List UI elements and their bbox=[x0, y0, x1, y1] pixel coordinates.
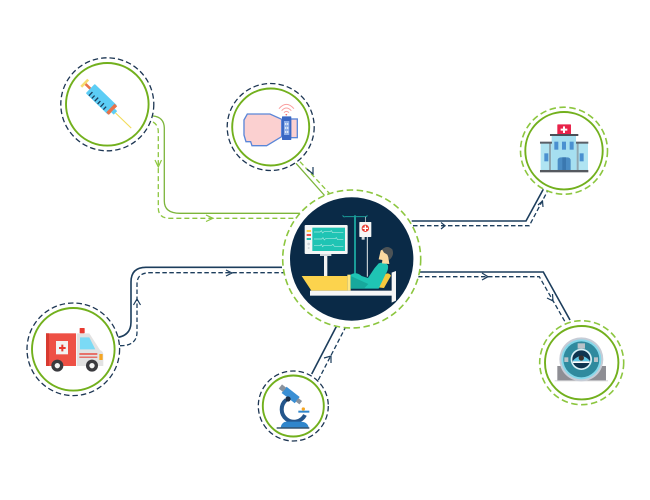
IV stand and drip bag bbox=[343, 215, 371, 277]
node: central patient illustration bbox=[283, 190, 421, 328]
connector: ambulance to patient bbox=[118, 267, 284, 346]
illustration: patient in hospital bed with monitor and IV bbox=[302, 215, 396, 303]
node: microscope bbox=[258, 371, 328, 441]
patient monitor bbox=[305, 225, 348, 277]
icon: ambulance bbox=[46, 328, 103, 372]
node: MRI scanner bbox=[540, 321, 624, 405]
connector: patient to MRI scanner bbox=[418, 272, 570, 322]
connector: microscope to patient bbox=[312, 323, 345, 380]
node: ambulance bbox=[27, 303, 120, 396]
icon: microscope bbox=[277, 384, 309, 429]
bed bbox=[302, 271, 396, 303]
icon: syringe bbox=[79, 78, 136, 133]
patient bbox=[351, 247, 393, 289]
connector: wristband to patient bbox=[296, 162, 330, 196]
icon: hospital building bbox=[540, 124, 588, 172]
icon: MRI scanner bbox=[555, 337, 608, 381]
node: wristband on hand bbox=[227, 84, 314, 170]
connector: patient to hospital bbox=[412, 189, 548, 229]
node: hospital bbox=[520, 107, 608, 194]
icon: hand with smart wristband bbox=[244, 104, 297, 146]
connector: syringe to patient bbox=[153, 116, 300, 222]
node: syringe bbox=[61, 58, 154, 151]
